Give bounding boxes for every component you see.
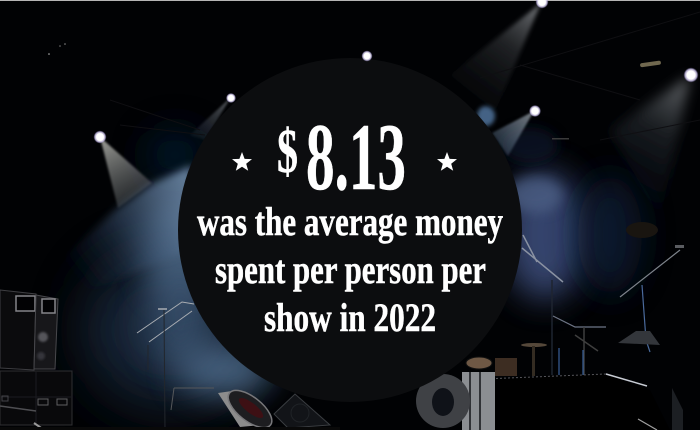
spotlight beams xyxy=(50,3,690,290)
truss lines xyxy=(110,12,700,140)
speaker stack xyxy=(0,290,72,430)
description text: was the average money xyxy=(197,199,503,244)
floor monitors xyxy=(0,384,340,430)
statistic: $8.13: $ xyxy=(277,118,298,186)
stage riser xyxy=(495,374,683,430)
light above circle xyxy=(362,50,372,62)
statistic: $8.13 xyxy=(277,104,406,210)
description text: show in 2022 xyxy=(264,295,436,340)
icon: right star xyxy=(437,152,457,171)
circle panel xyxy=(178,58,522,402)
microphone stands left xyxy=(137,302,214,430)
icon: left star xyxy=(232,152,252,171)
description text: spent per person per xyxy=(215,247,486,292)
drum kit and stands right xyxy=(416,222,684,430)
lights xyxy=(48,0,698,144)
blue stage haze xyxy=(85,106,642,405)
statistic: $8.13: 8.13 xyxy=(306,104,406,210)
top edge line xyxy=(0,0,700,1)
description text xyxy=(197,199,503,340)
